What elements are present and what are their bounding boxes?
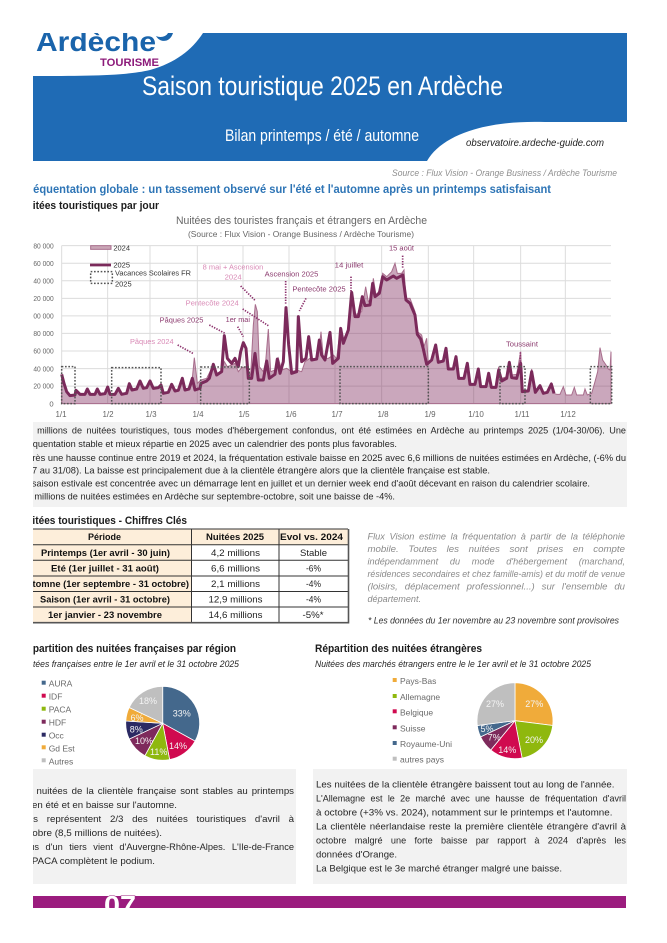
row: saison: 12,9 millions xyxy=(208,594,263,606)
pie chart: pays: 14% xyxy=(498,745,516,755)
row: été: Eté (1er juillet - 31 août) xyxy=(51,564,159,574)
panel: clientèle étrangère: octobre malgré une forte baisse par rapport à 2024 d'après les xyxy=(316,835,626,846)
pie chart: régions: 33% xyxy=(173,708,191,718)
panel: clientèle française: Plus d'un tiers vient d'Auvergne-Rhône-Alpes. L'Ile-de-France xyxy=(21,842,294,853)
y axis labels: 0 xyxy=(49,399,54,408)
pie chart: pays: 27% xyxy=(525,699,543,709)
annotations: 1er mai xyxy=(226,315,250,324)
methodology note: (loisirs, déplacement professionnel...) sur l'ensemble du xyxy=(368,582,625,592)
page number: 07 xyxy=(104,890,136,920)
legend: régions: HDF xyxy=(49,718,66,728)
x axis labels: 1/6 xyxy=(285,410,297,419)
logo: Ardèche Tourisme: TOURISME xyxy=(100,57,159,69)
row: printemps: Printemps (1er avril - 30 juin) xyxy=(41,548,170,559)
legend: pays: Pays-Bas xyxy=(400,676,436,686)
panel: commentary on the season: Après une hausse continue entre 2019 et 2024, la fréquentation estivale baisse en 2025 avec 6,6 millions de nuitées estimées en Ardèche, (-6% du xyxy=(21,453,626,464)
legend: 2024 xyxy=(113,243,130,252)
x axis labels: 1/8 xyxy=(377,410,389,419)
x axis labels: 1/9 xyxy=(424,410,436,419)
table header row: Période xyxy=(88,532,121,543)
pie chart: régions xyxy=(126,686,200,760)
chart title: Nuitées des touristes français et étrangers en Ardèche xyxy=(176,215,427,227)
methodology note: indépendamment du mode d'hébergement (marchand, xyxy=(368,557,625,567)
y axis labels: 40 000 xyxy=(33,364,54,373)
legend: régions: AURA xyxy=(49,679,73,689)
annotations: Pentecôte 2024 xyxy=(186,299,239,308)
legend: régions: Autres xyxy=(49,756,73,766)
methodology note: mobile. Toutes les nuitées sont prises en compte xyxy=(368,544,625,554)
row: printemps xyxy=(42,550,327,558)
y axis labels: 100 000 xyxy=(30,312,54,321)
methodology note: Flux Vision estime la fréquentation à partir de la téléphonie xyxy=(368,531,625,541)
legend: 2025 xyxy=(115,279,132,288)
annotations: Toussaint xyxy=(506,340,538,349)
subtitle: Bilan printemps / été / automne xyxy=(225,126,419,145)
pie chart: pays xyxy=(477,683,553,759)
panel: commentary on the season: 4,2 millions de nuitées touristiques, tous modes d'hébergement confondus, ont été estimées en Ardèche au printemps 2025 (1/04-30/06). Une xyxy=(20,426,626,436)
legend: Vacances Scolaires FR xyxy=(115,268,191,277)
annotations: Pentecôte 2025 xyxy=(292,284,346,293)
annotations: 14 juillet xyxy=(335,260,363,269)
plot area xyxy=(30,241,612,408)
logo: Ardèche Tourisme xyxy=(36,33,173,66)
line: 2025 xyxy=(62,275,554,396)
y axis labels: 120 000 xyxy=(30,294,54,303)
y axis labels xyxy=(34,244,54,406)
panel: commentary on the season xyxy=(19,422,627,507)
x axis labels: 1/12 xyxy=(560,410,576,419)
x axis labels xyxy=(56,411,576,417)
legend: 2025 xyxy=(113,260,130,269)
source line: Source : Flux Vision - Orange Business / Ardèche Tourisme xyxy=(392,168,617,179)
panel: clientèle étrangère: La Belgique est le 3e marché étranger malgré une baisse. xyxy=(316,863,562,874)
panel: clientèle étrangère: données d'Orange. xyxy=(316,849,397,860)
pie chart: pays: 5% xyxy=(480,724,494,734)
methodology note: * Les données du 1er novembre au 23 novembre sont provisoires xyxy=(368,616,619,626)
annotations: Pâques 2024 xyxy=(130,337,174,346)
y axis labels: 60 000 xyxy=(33,347,54,356)
pie chart: régions: 10% xyxy=(135,736,153,746)
legend: régions: Gd Est xyxy=(49,743,75,753)
heading: répartition étrangères xyxy=(315,643,592,670)
annotations: 15 août xyxy=(389,243,414,252)
footer bar xyxy=(33,896,626,908)
title: Saison touristique 2025 en Ardèche xyxy=(142,71,503,101)
pie chart: régions: 8% xyxy=(130,724,143,734)
row: été: -6% xyxy=(306,564,321,574)
pie chart: régions: 11% xyxy=(150,747,167,757)
table header row: Evol vs. 2024 xyxy=(280,532,344,543)
panel: clientèle étrangère: à octobre (+3% vs. 2024), notamment sur le printemps et l'automne. xyxy=(316,807,612,818)
row: automne: Automne (1er septembre - 31 octobre) xyxy=(20,579,189,590)
panel: clientèle française: et PACA complètent le podium. xyxy=(21,856,155,867)
panel: commentary on the season: 1/07 au 31/08). La baisse est principalement due à la clientèle étrangère alors que la clientèle française est stable. xyxy=(19,466,490,476)
legend: pays: Royaume-Uni xyxy=(400,739,452,749)
methodology note: département. xyxy=(368,594,421,604)
row: année: -5%* xyxy=(302,610,324,621)
row: saison xyxy=(40,596,321,604)
logo: Ardèche Tourisme: Ardèche xyxy=(36,26,156,57)
annotations xyxy=(130,243,538,364)
methodology note xyxy=(368,531,625,626)
x axis labels: 1/10 xyxy=(468,410,484,419)
pie chart: pays: 7% xyxy=(488,732,501,742)
legend: régions xyxy=(42,679,75,766)
legend: régions: Occ xyxy=(49,731,65,741)
panel: commentary on the season: fréquentation stable et mieux répartie en 2025 avec un calendrier des ponts plus favorables. xyxy=(22,439,397,450)
row: année: 14,6 millions xyxy=(208,610,263,621)
y axis labels: 140 000 xyxy=(30,276,54,285)
pie chart: régions: 6% xyxy=(130,713,144,723)
table header row xyxy=(88,534,343,540)
panel: clientèle étrangère xyxy=(313,769,627,884)
panel: clientèle étrangère: L'Allemagne est le 2e marché avec une hausse de fréquentation d'avril xyxy=(316,793,626,804)
area: 2024 xyxy=(62,263,611,404)
row: automne: 2,1 millions xyxy=(211,579,260,590)
annotations: 2024 xyxy=(225,272,242,281)
legend: régions: PACA xyxy=(49,705,72,715)
legend: pays xyxy=(393,676,452,765)
annotations: Ascension 2025 xyxy=(265,269,318,278)
row: automne: -4% xyxy=(306,579,321,590)
school holiday periods xyxy=(62,367,612,404)
y axis labels: 160 000 xyxy=(30,259,54,268)
panel: commentary on the season: La saison estivale est concentrée avec un démarrage lent en juillet et un dernier week end d'août décevant en raison du calendrier scolaire. xyxy=(19,478,590,490)
row: été xyxy=(52,565,321,574)
row: saison: -4% xyxy=(306,594,321,606)
pie chart: régions: 18% xyxy=(139,696,157,706)
heading: répartition françaises: Répartition des nuitées françaises par région xyxy=(20,643,236,655)
legend xyxy=(90,243,191,288)
annotations: 8 mai + Ascension xyxy=(203,262,263,271)
chart subtitle: (Source : Flux Vision - Orange Business / Ardèche Tourisme) xyxy=(188,229,414,239)
panel: commentary on the season: 2,1 millions de nuitées estimées en Ardèche sur septembre-octobre, soit une baisse de -4%. xyxy=(19,492,395,502)
x axis labels: 1/4 xyxy=(192,410,204,419)
row: année: 1er janvier - 23 novembre xyxy=(48,610,162,621)
annotations: Pâques 2025 xyxy=(160,315,203,324)
pie chart: pays: 20% xyxy=(525,735,543,745)
subtitle: Nuitées des marchés étrangers entre le le 1er avril et le 31 octobre 2025 xyxy=(315,659,592,670)
x axis labels: 1/11 xyxy=(515,410,530,419)
row: année xyxy=(48,612,324,620)
panel: clientèle française: Elles représentent 2/3 des nuitées touristiques d'avril à xyxy=(17,814,295,825)
panel: clientèle étrangère: La clientèle néerlandaise reste la première clientèle étrangère d'avril à xyxy=(316,821,627,832)
heading: répartition étrangères: Répartition des nuitées étrangères xyxy=(315,643,482,655)
y axis labels: 20 000 xyxy=(33,382,54,391)
legend: pays: Belgique xyxy=(400,707,433,717)
panel: clientèle étrangère: Les nuitées de la clientèle étrangère baissent tout au long de l'année. xyxy=(316,779,614,790)
row: printemps: Stable xyxy=(300,548,327,559)
panel: clientèle française: octobre (8,5 millions de nuitées). xyxy=(19,828,162,839)
panel: clientèle française: Les nuitées de la clientèle française sont stables au printemps xyxy=(17,786,294,797)
x axis labels: 1/2 xyxy=(102,410,114,419)
heading: répartition françaises xyxy=(33,644,239,669)
section heading: fréquentation globale: Fréquentation globale : un tassement observé sur l'été et l'automne après un printemps satisfaisant xyxy=(22,184,551,196)
row: été: 6,6 millions xyxy=(211,564,260,574)
panel: clientèle française: en été et en baisse sur l'automne. xyxy=(32,800,177,811)
row: automne xyxy=(33,580,321,589)
x axis labels: 1/1 xyxy=(55,410,67,419)
chart: nuitées touristiques par jour xyxy=(30,215,612,419)
legend: pays: Suisse xyxy=(400,723,426,733)
x axis labels: 1/7 xyxy=(331,410,343,419)
x axis labels: 1/5 xyxy=(238,410,250,419)
legend: pays: Allemagne xyxy=(400,692,440,702)
methodology note: résidences secondaires et chez famille-amis) et du motif de venue xyxy=(368,569,625,579)
row: printemps: 4,2 millions xyxy=(211,548,260,559)
panel: clientèle française xyxy=(17,769,296,884)
sub heading: nuitées par jour: Nuitées touristiques par jour xyxy=(19,200,160,212)
pie chart: pays: 27% xyxy=(486,699,504,709)
x axis labels: 1/3 xyxy=(145,410,157,419)
heading: chiffres clés: Nuitées touristiques - Chiffres Clés xyxy=(19,515,187,527)
legend: régions: IDF xyxy=(49,692,62,702)
y axis labels: 80 000 xyxy=(33,329,54,338)
subtitle: Nuitées françaises entre le 1er avril et le 31 octobre 2025 xyxy=(20,659,240,670)
y axis labels: 180 000 xyxy=(30,241,54,250)
pie chart: régions: 14% xyxy=(169,741,187,751)
table: chiffres clés xyxy=(20,529,348,623)
table header row: Nuitées 2025 xyxy=(206,532,265,543)
website: observatoire.ardeche-guide.com xyxy=(466,137,604,149)
header banner xyxy=(33,26,627,161)
legend: pays: autres pays xyxy=(400,755,444,765)
row: saison: Saison (1er avril - 31 octobre) xyxy=(40,594,170,606)
